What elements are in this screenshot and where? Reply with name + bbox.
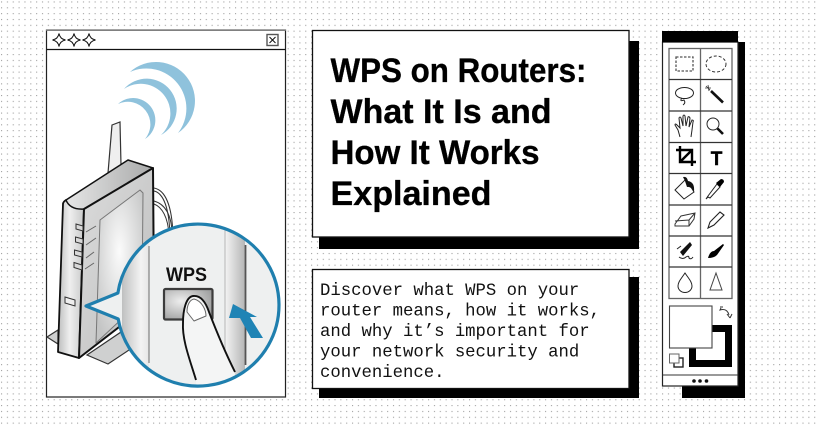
arrow pointing at button [229,304,263,338]
icon: magic wand [705,85,723,102]
magnified callout circle [86,224,279,390]
panel: illustration window [46,30,286,397]
description text: and why it’s important for [320,323,590,342]
title: What It Is and [330,93,552,131]
router illustration [47,122,173,364]
icon: type tool: T [711,149,723,170]
icon: foreground color swatch [670,306,712,348]
WPS label: WPS [166,264,207,286]
icon: paint bucket [675,177,694,199]
panel: tool palette [662,31,745,398]
router LEDs [65,224,96,306]
callout outline [86,224,279,386]
tool grid [669,48,732,298]
icon: lasso [676,88,694,105]
icon: magnifier [707,118,723,134]
panel: title card [312,30,639,249]
description text: convenience. [320,364,444,383]
icon: drop [678,273,692,292]
title: How It Works [330,134,540,172]
icon: window close box [267,34,278,46]
icon: eraser [675,213,695,226]
icon: brush [708,244,724,258]
icon: swap colors arrow [720,307,732,318]
icon: window sparkles [52,34,96,46]
icon: default colors [670,354,683,367]
description text: router means, how it works, [320,302,600,322]
panel: description card [312,270,639,398]
router body [58,160,154,358]
icon: cone [710,273,722,290]
icon: wifi signal waves [118,62,195,139]
antenna [108,122,121,173]
icon: crop [676,146,696,166]
icon: pencil [708,212,724,228]
icon: eyedropper [706,179,724,199]
icon: more dots [692,379,708,383]
icon: marquee ellipse [706,56,726,72]
title: Explained [330,175,492,213]
icon: router cables [154,188,173,235]
router stand [47,330,135,364]
title: WPS on Routers: [330,52,586,90]
icon: hand [675,115,693,137]
icon: calligraphy pen [677,242,693,259]
WPS button [164,289,212,320]
finger pressing button [183,296,235,390]
icon: background color swatch [692,328,728,364]
icon: marquee rectangle [676,57,693,71]
description text: Discover what WPS on your [320,282,579,301]
description text: your network security and [320,344,579,362]
